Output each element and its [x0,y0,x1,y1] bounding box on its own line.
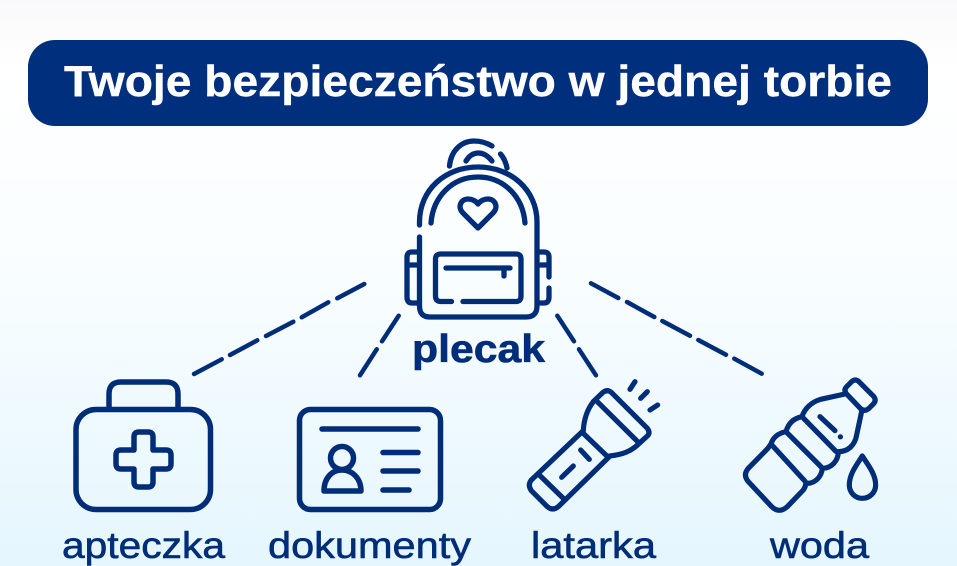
label: woda: woda [769,524,869,566]
icon: first aid kit [76,382,210,510]
dashed connector: documents [360,316,399,375]
dashed connector: flashlight [557,316,596,375]
icon: ID document [300,410,440,510]
dashed connector: first aid kit [194,284,364,374]
icon: water bottle [745,380,876,510]
dashed connector: water [591,283,762,374]
label: plecak: plecak [412,328,545,371]
label: apteczka: apteczka [62,524,225,566]
label: latarka: latarka [531,524,656,566]
label: dokumenty: dokumenty [268,524,471,566]
icon: flashlight [529,382,658,509]
title banner [28,40,928,126]
title: Twoje bezpieczeństwo w jednej torbie [64,57,892,106]
icon: backpack [407,141,549,317]
